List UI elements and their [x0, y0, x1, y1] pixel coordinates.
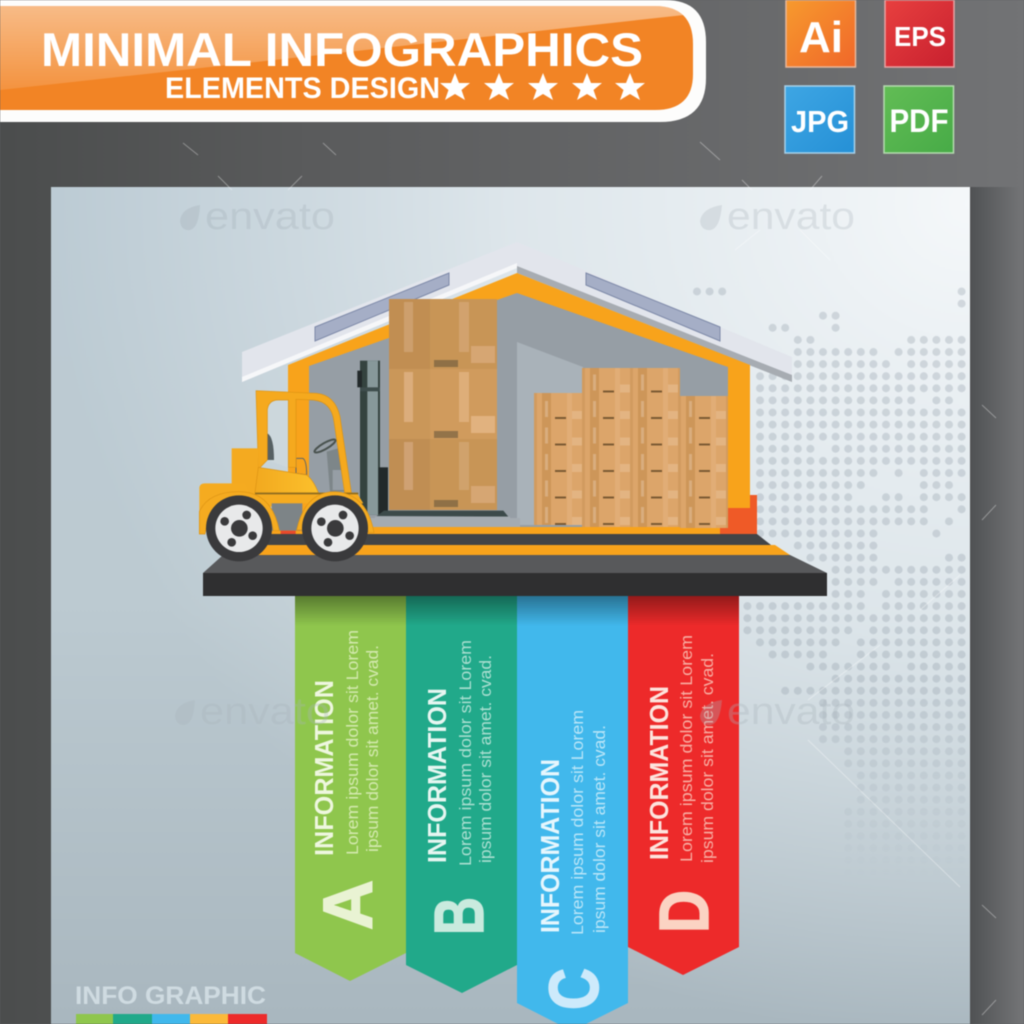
subtitle: ELEMENTS DESIGN: [165, 72, 440, 105]
body text D: ipsum dolor sit amet. cvad.: [698, 653, 717, 863]
body text C: [568, 710, 609, 935]
front wheel: [302, 495, 368, 561]
heading B: INFORMATION: [422, 688, 452, 863]
cab window: [267, 400, 288, 467]
badge: Ai: Ai: [799, 13, 843, 62]
title: MINIMAL INFOGRAPHICS: [41, 24, 643, 77]
steering column and wheel: [313, 437, 346, 492]
letter B: B: [420, 897, 498, 935]
letter A: A: [309, 880, 387, 930]
watermark scratch lines: [183, 142, 996, 1015]
passenger seat box: [296, 458, 307, 475]
warehouse illustration: [199, 242, 827, 596]
badge: EPS: [885, 0, 954, 67]
cab frame: [256, 391, 351, 493]
badge: PDF: PDF: [890, 103, 948, 139]
letter C: C: [535, 968, 613, 1010]
front mudguard: [297, 492, 374, 533]
dark platform: [203, 555, 827, 596]
lower envato watermarks: [175, 691, 855, 733]
badge: JPG: JPG: [791, 104, 849, 139]
forklift: [199, 391, 374, 561]
warehouse interior: [309, 293, 728, 527]
badge: JPG: [785, 86, 854, 153]
body text A: [343, 630, 382, 855]
colour legend bar: [76, 1014, 267, 1024]
main panel: [51, 187, 970, 1024]
ribbon D: [628, 596, 739, 975]
rear mudguard: [199, 492, 279, 534]
rear wheel: [206, 495, 272, 561]
road floor: [250, 527, 790, 555]
dotted world map: [693, 287, 966, 790]
ribbon A: [295, 596, 406, 981]
badge: Ai: [786, 0, 856, 67]
body text A: ipsum dolor sit amet. cvad.: [363, 645, 382, 852]
body text C: ipsum dolor sit amet. cvad.: [590, 725, 609, 933]
driver seat back: [267, 433, 274, 460]
body text D: [677, 635, 717, 863]
badge: PDF: [884, 86, 954, 153]
red-orange corner block: [715, 495, 757, 534]
heading A: INFORMATION: [309, 680, 339, 856]
ribbon C: [517, 596, 628, 1024]
letter D: D: [645, 890, 723, 933]
warehouse roof: [242, 242, 792, 382]
format badges: [785, 0, 954, 153]
heading D: INFORMATION: [644, 686, 674, 860]
top envato watermarks: envato: [205, 196, 335, 238]
body text A: Lorem ipsum dolor sit Lorem: [343, 630, 362, 855]
body text C: Lorem ipsum dolor sit Lorem: [568, 710, 587, 935]
lower envato watermarks: envato: [200, 691, 330, 733]
stacked small boxes: [534, 368, 728, 528]
body text B: ipsum dolor sit amet. cvad.: [476, 655, 495, 863]
body text B: [456, 640, 495, 866]
badge: EPS: EPS: [894, 21, 946, 52]
top envato watermarks: [180, 196, 855, 238]
forklift body: [199, 448, 363, 534]
warehouse frame: [288, 273, 750, 530]
forklift mast and forks: [357, 361, 510, 525]
header banner: [0, 0, 706, 122]
body text B: Lorem ipsum dolor sit Lorem: [456, 640, 475, 866]
ribbon B: [406, 596, 517, 993]
heading C: INFORMATION: [535, 759, 565, 933]
rating stars: [440, 73, 645, 100]
info graphic label: INFO GRAPHIC: [75, 982, 266, 1010]
large cardboard boxes: [389, 299, 497, 510]
body text D: Lorem ipsum dolor sit Lorem: [677, 635, 696, 862]
top envato watermarks: envato: [727, 196, 855, 238]
lower envato watermarks: envato: [727, 691, 855, 733]
